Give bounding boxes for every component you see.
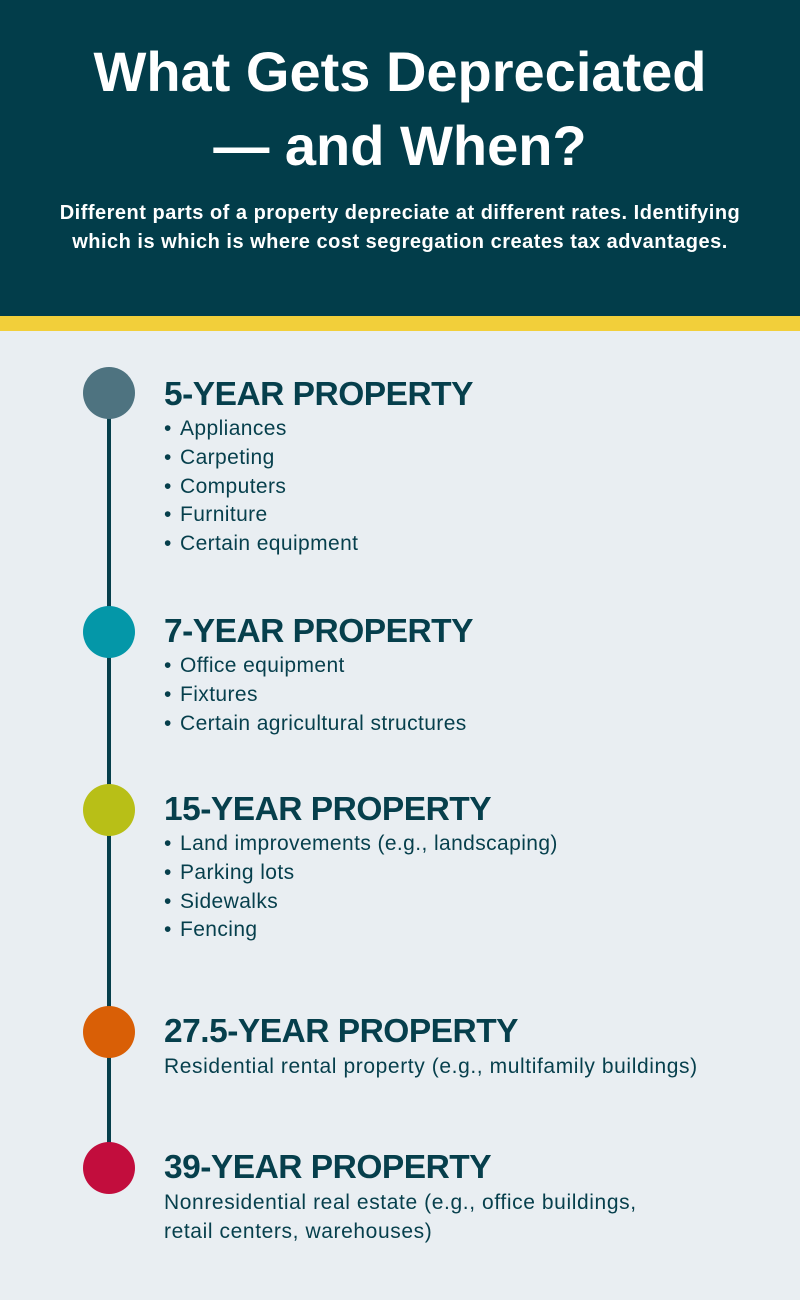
section: 39-year <box>164 1149 637 1243</box>
section: 27.5-year: 27.5-YEAR PROPERTY <box>164 1013 518 1050</box>
header <box>0 0 800 316</box>
dot: 27.5-year <box>83 1006 135 1058</box>
dot: 5-year <box>83 367 135 419</box>
section: 7-year: Fixtures <box>180 683 258 706</box>
section: 5-year: Carpeting <box>180 446 275 469</box>
title <box>93 40 707 177</box>
section: 39-year: 39-YEAR PROPERTY <box>164 1149 491 1186</box>
dot: 39-year <box>83 1142 135 1194</box>
subtitle <box>60 202 740 253</box>
section: 7-year: 7-YEAR PROPERTY <box>164 613 473 650</box>
timeline line <box>107 393 111 1168</box>
section: 7-year <box>164 613 473 735</box>
dot: 7-year <box>83 606 135 658</box>
section: 5-year <box>164 376 473 555</box>
section: 5-year: Furniture <box>180 503 268 526</box>
accent bar <box>0 316 800 331</box>
dot: 15-year <box>83 784 135 836</box>
section: 15-year: 15-YEAR PROPERTY <box>164 791 491 828</box>
section: 39-year: Nonresidential real estate (e.g., office buildings, <box>164 1191 637 1214</box>
section: 15-year: Fencing <box>180 918 258 941</box>
section: 27.5-year <box>164 1013 698 1078</box>
section: 5-year: Computers <box>180 475 286 498</box>
section: 15-year: Parking lots <box>180 861 295 884</box>
subtitle: Different parts of a property depreciate at different rates. Identifying <box>60 202 740 224</box>
section: 39-year: retail centers, warehouses) <box>164 1220 432 1243</box>
section: 7-year: Certain agricultural structures <box>180 712 467 735</box>
subtitle: which is which is where cost segregation creates tax advantages. <box>72 231 728 253</box>
section: 7-year: Office equipment <box>180 654 345 677</box>
title: — and When? <box>213 114 587 177</box>
section: 15-year <box>164 791 558 941</box>
section: 5-year: Certain equipment <box>180 532 358 555</box>
section: 27.5-year: Residential rental property (e.g., multifamily buildings) <box>164 1055 698 1078</box>
section: 5-year: Appliances <box>180 417 287 440</box>
title: What Gets Depreciated <box>93 40 707 103</box>
section: 5-year: 5-YEAR PROPERTY <box>164 376 473 413</box>
section: 15-year: Land improvements (e.g., landscaping) <box>180 832 558 855</box>
section: 15-year: Sidewalks <box>180 890 278 913</box>
